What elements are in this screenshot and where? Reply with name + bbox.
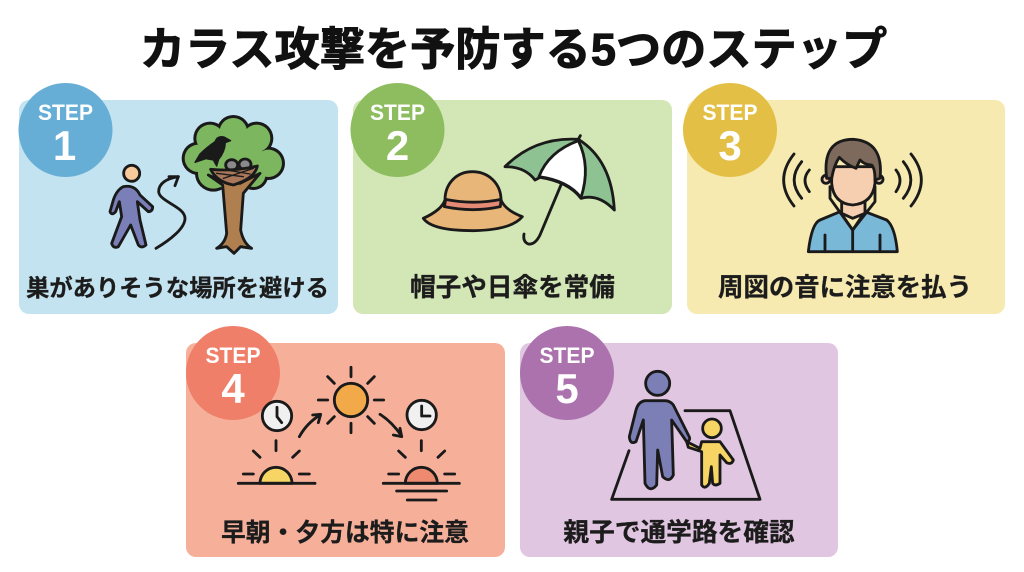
panel: step 1 [18,83,338,314]
sound waves [784,154,921,206]
icon: parent and child on road [612,371,760,499]
icon: hat and umbrella [423,136,614,244]
title: カラス攻撃を予防する5つのステップ [140,24,887,75]
morning clock [262,401,292,431]
step 5 badge [520,326,614,420]
step 2 badge: STEP [370,100,425,125]
panel: step 4 [186,326,505,557]
panel: step 5 [520,326,838,557]
step 5 badge: STEP [540,343,594,368]
step 1 badge: STEP [38,100,93,125]
step 4 badge: 4 [221,365,245,412]
step 4 badge [186,326,280,420]
caption 2: 帽子や日傘を常備 [410,273,615,302]
step 1 badge [18,83,112,177]
evening clock [407,400,436,430]
arrow down [380,414,402,437]
arrow up [299,414,321,437]
umbrella [505,136,614,244]
step 3 badge: STEP [702,100,758,125]
head [822,139,883,230]
nest with eggs [211,159,257,185]
caption 5: 親子で通学路を確認 [563,518,795,547]
hat [423,172,522,231]
shirt [808,212,897,252]
crow [195,137,231,166]
sunset [383,441,459,500]
step 2 badge: 2 [386,122,409,169]
midday sun [318,367,384,433]
step 2 badge [350,83,444,177]
step 1 badge: 1 [53,122,76,169]
step 5 badge: 5 [555,365,579,412]
tree [182,115,285,253]
caption 1: 巣がありそうな場所を避ける [26,274,329,301]
panel: step 3 [683,83,1005,314]
panel: step 2 [350,83,672,314]
icon: sun path with clocks [238,367,459,500]
caption 3: 周図の音に注意を払う [718,274,972,302]
step 3 badge [683,83,777,177]
road [612,411,760,499]
icon: walking person avoiding tree with crow nest [110,115,285,253]
child [687,419,733,487]
step 4 badge: STEP [206,343,260,368]
icon: person listening [784,139,921,252]
adult [629,371,690,489]
step 3 badge: 3 [718,122,742,169]
sunrise [238,441,315,483]
person [110,165,153,247]
caption 4: 早朝・夕方は特に注意 [221,519,469,547]
winding arrow [156,177,185,248]
